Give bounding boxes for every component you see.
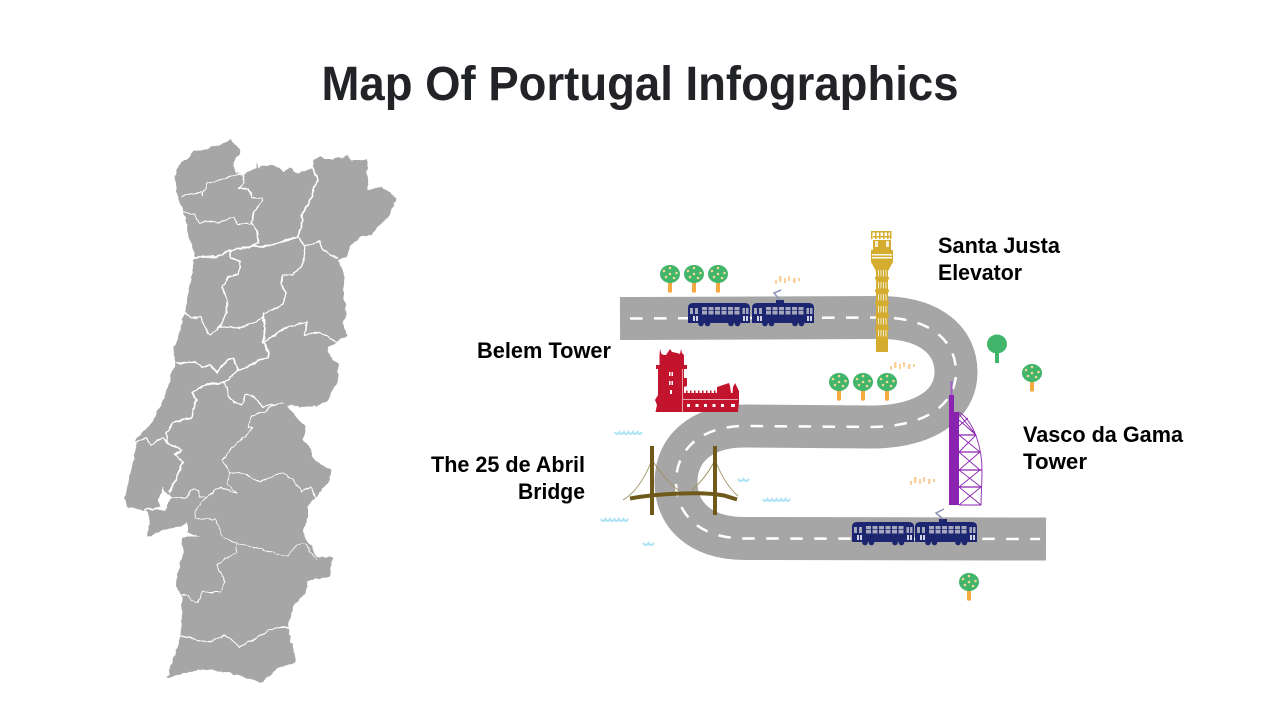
- Tagus estuary: [145, 486, 172, 510]
- label: The 25 de Abril Bridge: The 25 de Abril: [431, 452, 585, 477]
- icon: 25 de Abril Bridge: [623, 446, 738, 515]
- trees inside top bend: [829, 373, 897, 401]
- tree bottom: [959, 573, 979, 601]
- label: Santa Justa Elevator: Santa Justa: [938, 233, 1061, 258]
- title: Map Of Portugal Infographics: [322, 58, 958, 111]
- label: Santa Justa Elevator: Elevator: [938, 260, 1022, 285]
- tram bottom road: [852, 509, 977, 545]
- icon: Vasco da Gama Tower: [949, 381, 982, 505]
- winding road: [620, 318, 1046, 539]
- water ripples: [601, 432, 790, 545]
- label: Belem Tower: Belem Tower: [477, 338, 611, 363]
- steam dots: [775, 276, 935, 485]
- label: Vasco da Gama Tower: Vasco da Gama: [1023, 422, 1184, 447]
- trees beside top road: [660, 265, 728, 293]
- icon: Santa Justa Elevator: [871, 231, 893, 352]
- label: The 25 de Abril Bridge: Bridge: [518, 479, 585, 504]
- icon: Belem Tower: [655, 349, 739, 412]
- tree right: [1022, 364, 1042, 392]
- label: Vasco da Gama Tower: Tower: [1023, 449, 1087, 474]
- map of Portugal: [125, 139, 397, 683]
- plain green tree: [987, 334, 1007, 363]
- tram top road: [688, 290, 814, 326]
- label: Vasco da Gama Tower: [1023, 422, 1184, 474]
- label: Santa Justa Elevator: [938, 233, 1061, 285]
- label: The 25 de Abril Bridge: [431, 452, 585, 504]
